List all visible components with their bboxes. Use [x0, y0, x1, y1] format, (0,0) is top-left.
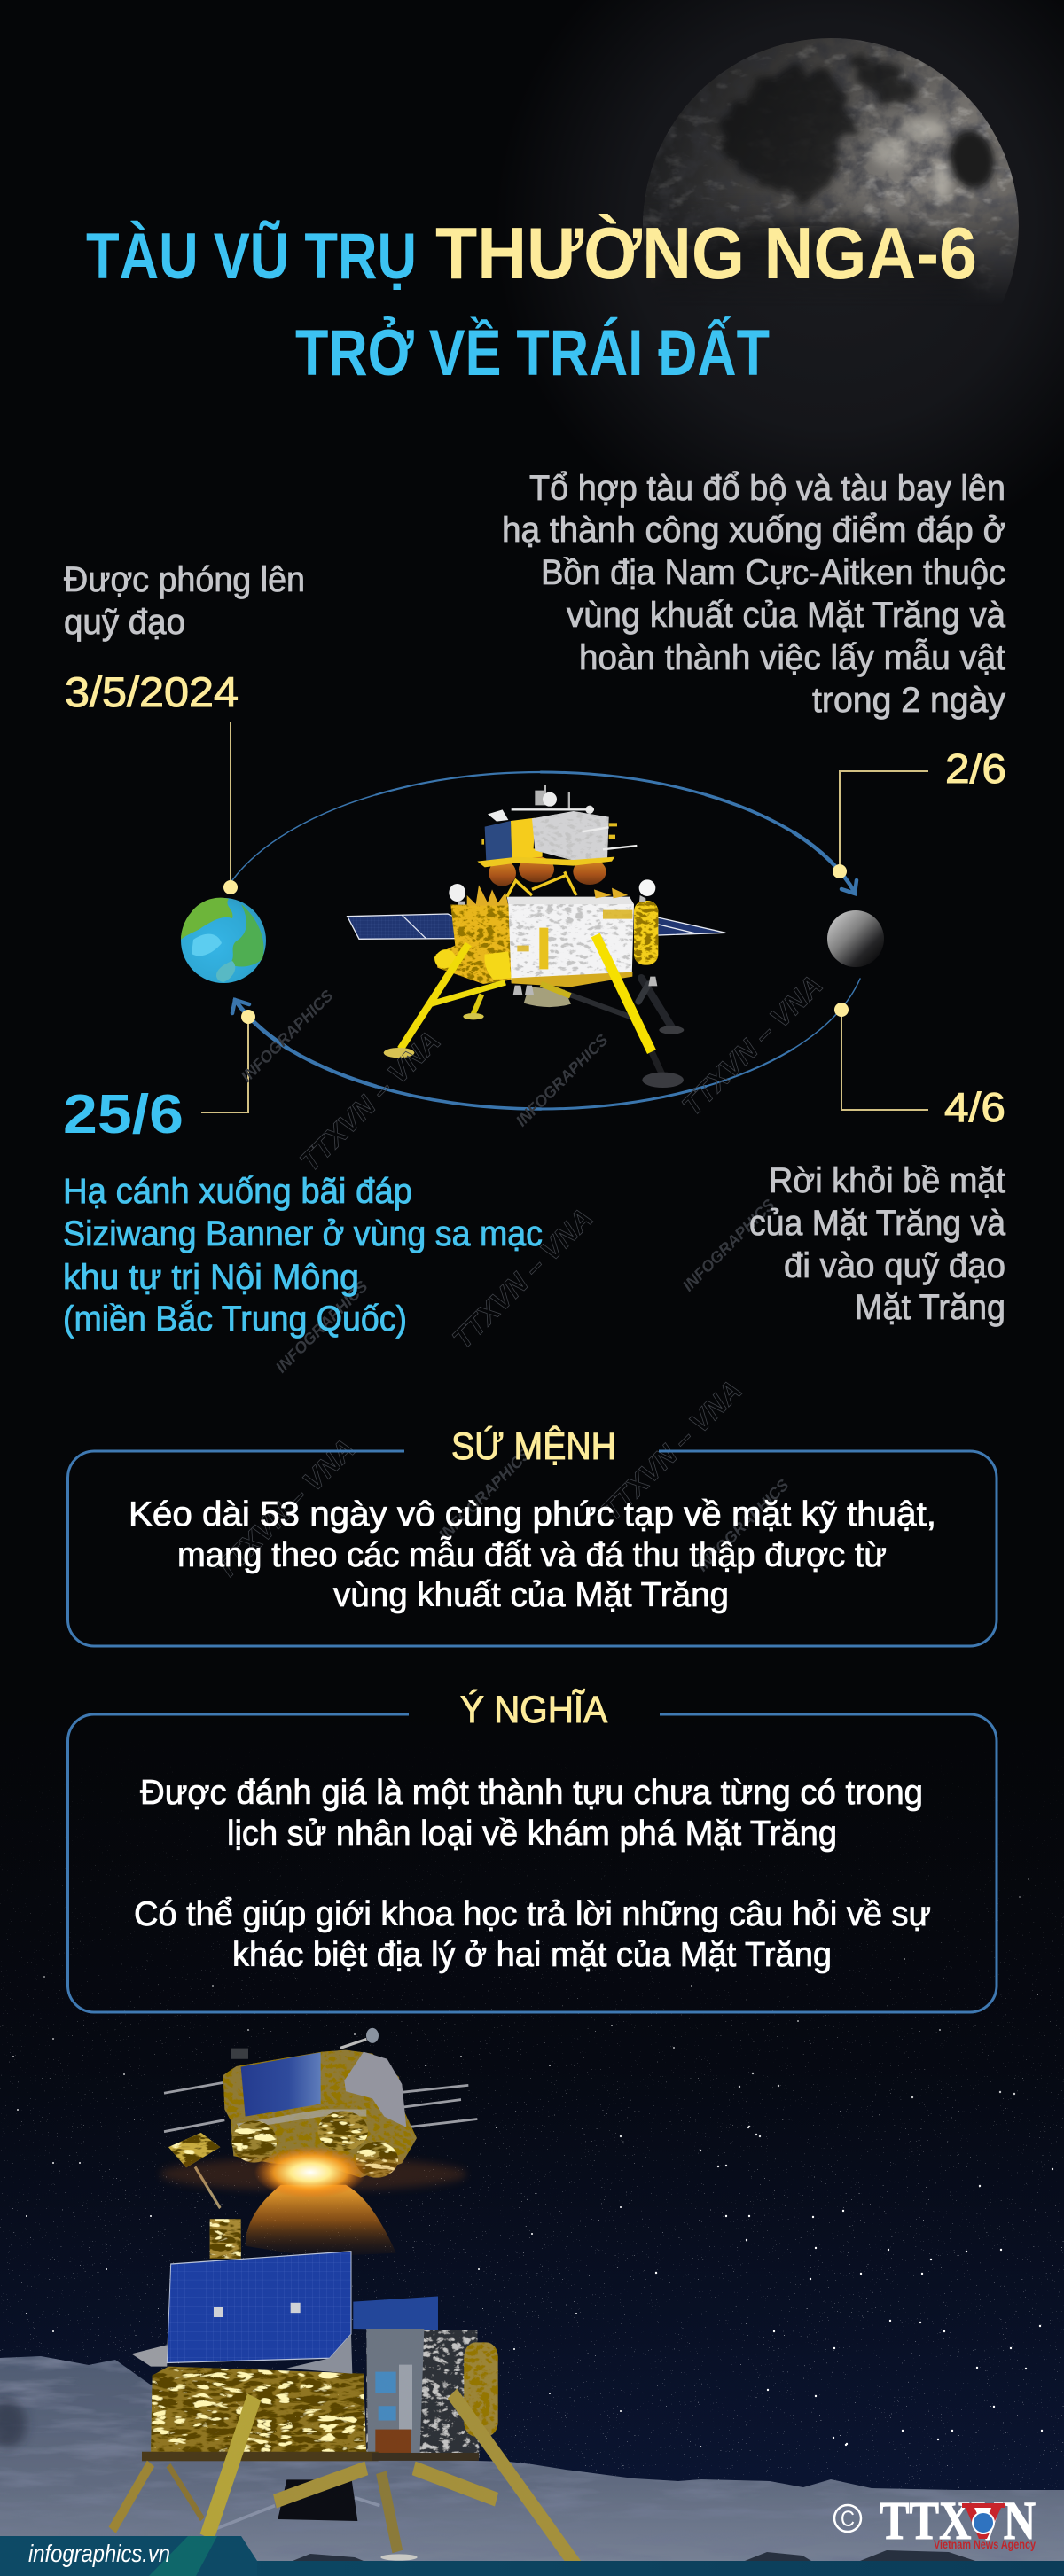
panel: mission: [67, 1425, 997, 1646]
watermarks: TTXVN – VNA: [208, 1432, 361, 1585]
footer tab: [0, 2536, 257, 2576]
lunar terrain: [0, 2356, 1064, 2576]
text: lift-off description: của Mặt Trăng và: [749, 1204, 1006, 1243]
mission text: vùng khuất của Mặt Trăng: [333, 1576, 729, 1614]
exhaust plume: [246, 2185, 396, 2257]
watermarks: INFOGRAPHICS: [512, 1031, 612, 1130]
rear leg: [569, 978, 672, 1028]
copyright mark: [834, 2505, 861, 2532]
significance text: lịch sử nhân loại về khám phá Mặt Trăng: [227, 1815, 837, 1853]
connector lines and dots: [201, 722, 928, 1112]
right side body: [366, 2329, 480, 2460]
footer band: [0, 2536, 1064, 2576]
text: landing description: trong 2 ngày: [812, 681, 1005, 720]
text: return landing description: (miền Bắc Trung Quốc): [63, 1299, 407, 1339]
arrowhead: [232, 1000, 249, 1013]
moon at top right: [555, 0, 1064, 502]
icon: moon small: [827, 910, 884, 967]
watermarks: TTXVN – VNA: [293, 1025, 446, 1177]
instruments: [535, 785, 570, 808]
significance text: khác biệt địa lý ở hai mặt của Mặt Trăng: [232, 1936, 832, 1974]
text: lift-off description: Rời khỏi bề mặt: [769, 1161, 1005, 1200]
mast: [210, 2219, 241, 2259]
title: [86, 212, 977, 389]
text: landing description: Tổ hợp tàu đổ bộ và tàu bay lên: [529, 469, 1005, 508]
starfield: [0, 1729, 1064, 2526]
orbit path: [232, 772, 860, 1109]
ascent module body: [485, 821, 512, 862]
watermarks: INFOGRAPHICS: [272, 1277, 372, 1377]
watermarks: TTXVN – VNA: [676, 969, 828, 1121]
text: launch description: quỹ đạo: [64, 603, 185, 642]
robotic arm box: [168, 2133, 220, 2167]
significance text: [134, 1774, 931, 1974]
dishes: [449, 884, 466, 902]
date: 4/6: 4/6: [944, 1084, 1005, 1130]
side equipment: [131, 2345, 167, 2367]
legs: [113, 2393, 576, 2566]
panel: significance: [67, 1689, 997, 2012]
text: launch description: [64, 560, 305, 642]
spacecraft illustration: lander and orbiter: [348, 785, 725, 1088]
platform: [142, 2452, 379, 2461]
watermarks: TTXVN – VNA: [446, 1202, 598, 1354]
gold main body: [151, 2367, 366, 2458]
struts between stages: [507, 871, 576, 897]
panel border: [67, 1714, 997, 2012]
nozzle: [524, 987, 571, 1007]
source website: infographics.vn: [28, 2540, 170, 2567]
text: landing description: hạ thành công xuống điểm đáp ở: [502, 511, 1005, 550]
title line 1 yellow: THƯỜNG NGA-6: [435, 212, 977, 294]
text: lift-off description: [749, 1161, 1006, 1327]
date: 25/6: 25/6: [63, 1084, 184, 1145]
text: landing description: vùng khuất của Mặt Trăng và: [567, 596, 1006, 635]
text: launch description: Được phóng lên: [64, 560, 305, 599]
title line 2: TRỞ VỀ TRÁI ĐẤT: [295, 317, 770, 389]
agency wordmark: TTXVN: [880, 2492, 1036, 2551]
significance text: Có thể giúp giới khoa học trả lời những câu hỏi về sự: [134, 1895, 931, 1933]
booms: [164, 2082, 477, 2132]
engine flare: [160, 2158, 467, 2190]
title line 1 blue: TÀU VŨ TRỤ: [86, 221, 417, 293]
agency tagline: Vietnam News Agency: [934, 2537, 1036, 2551]
text: landing description: hoàn thành việc lấy mẫu vật: [579, 637, 1005, 677]
emblem: [962, 2503, 1005, 2539]
back panel: [353, 2296, 438, 2330]
front legs: [401, 935, 662, 1075]
copyright mark: C: [841, 2507, 855, 2532]
mission text: Kéo dài 53 ngày vô cùng phức tạp về mặt kỹ thuật,: [129, 1495, 936, 1534]
watermarks: INFOGRAPHICS: [435, 1445, 535, 1544]
text: landing description: Bồn địa Nam Cực-Aitken thuộc: [541, 553, 1005, 592]
significance text: Được đánh giá là một thành tựu chưa từng có trong: [140, 1774, 923, 1812]
shadow under lander: [278, 2479, 357, 2521]
date: 3/5/2024: 3/5/2024: [65, 668, 239, 715]
watermarks: INFOGRAPHICS: [238, 987, 337, 1086]
propellant tanks: [489, 860, 516, 886]
TTXVN logo: [834, 2492, 1036, 2551]
text: return landing description: Siziwang Banner ở vùng sa mạc: [63, 1214, 543, 1253]
text: lift-off description: đi vào quỹ đạo: [784, 1246, 1005, 1285]
ascent body: [223, 2050, 417, 2178]
spacecraft illustration: ascent vehicle over lander: [113, 2028, 576, 2566]
watermarks: TTXVN – VNA: [595, 1374, 747, 1526]
heading: significance: Ý NGHĨA: [460, 1689, 607, 1731]
text: return landing description: khu tự trị Nội Mông: [63, 1258, 359, 1297]
main solar panel: [167, 2252, 351, 2363]
silver body: [508, 902, 634, 982]
mission text: [129, 1495, 936, 1614]
watermarks: INFOGRAPHICS: [679, 1196, 778, 1295]
solar panels: [348, 914, 725, 939]
icon: earth: [181, 898, 266, 983]
gold insulation: [436, 904, 513, 984]
text: lift-off description: Mặt Trăng: [855, 1288, 1005, 1327]
heading: mission: SỨ MỆNH: [451, 1425, 616, 1468]
panel border: [67, 1451, 997, 1646]
watermarks: INFOGRAPHICS: [693, 1476, 793, 1575]
watermarks: [208, 969, 828, 1585]
mission text: mang theo các mẫu đất và đá thu thập được từ: [177, 1536, 887, 1574]
arrowhead: [841, 880, 857, 894]
yellow tank: [634, 901, 658, 965]
date: 2/6: 2/6: [945, 745, 1006, 792]
text: landing description: [502, 469, 1006, 720]
text: return landing description: Hạ cánh xuống bãi đáp: [63, 1172, 412, 1211]
text: return landing description: [63, 1172, 543, 1339]
